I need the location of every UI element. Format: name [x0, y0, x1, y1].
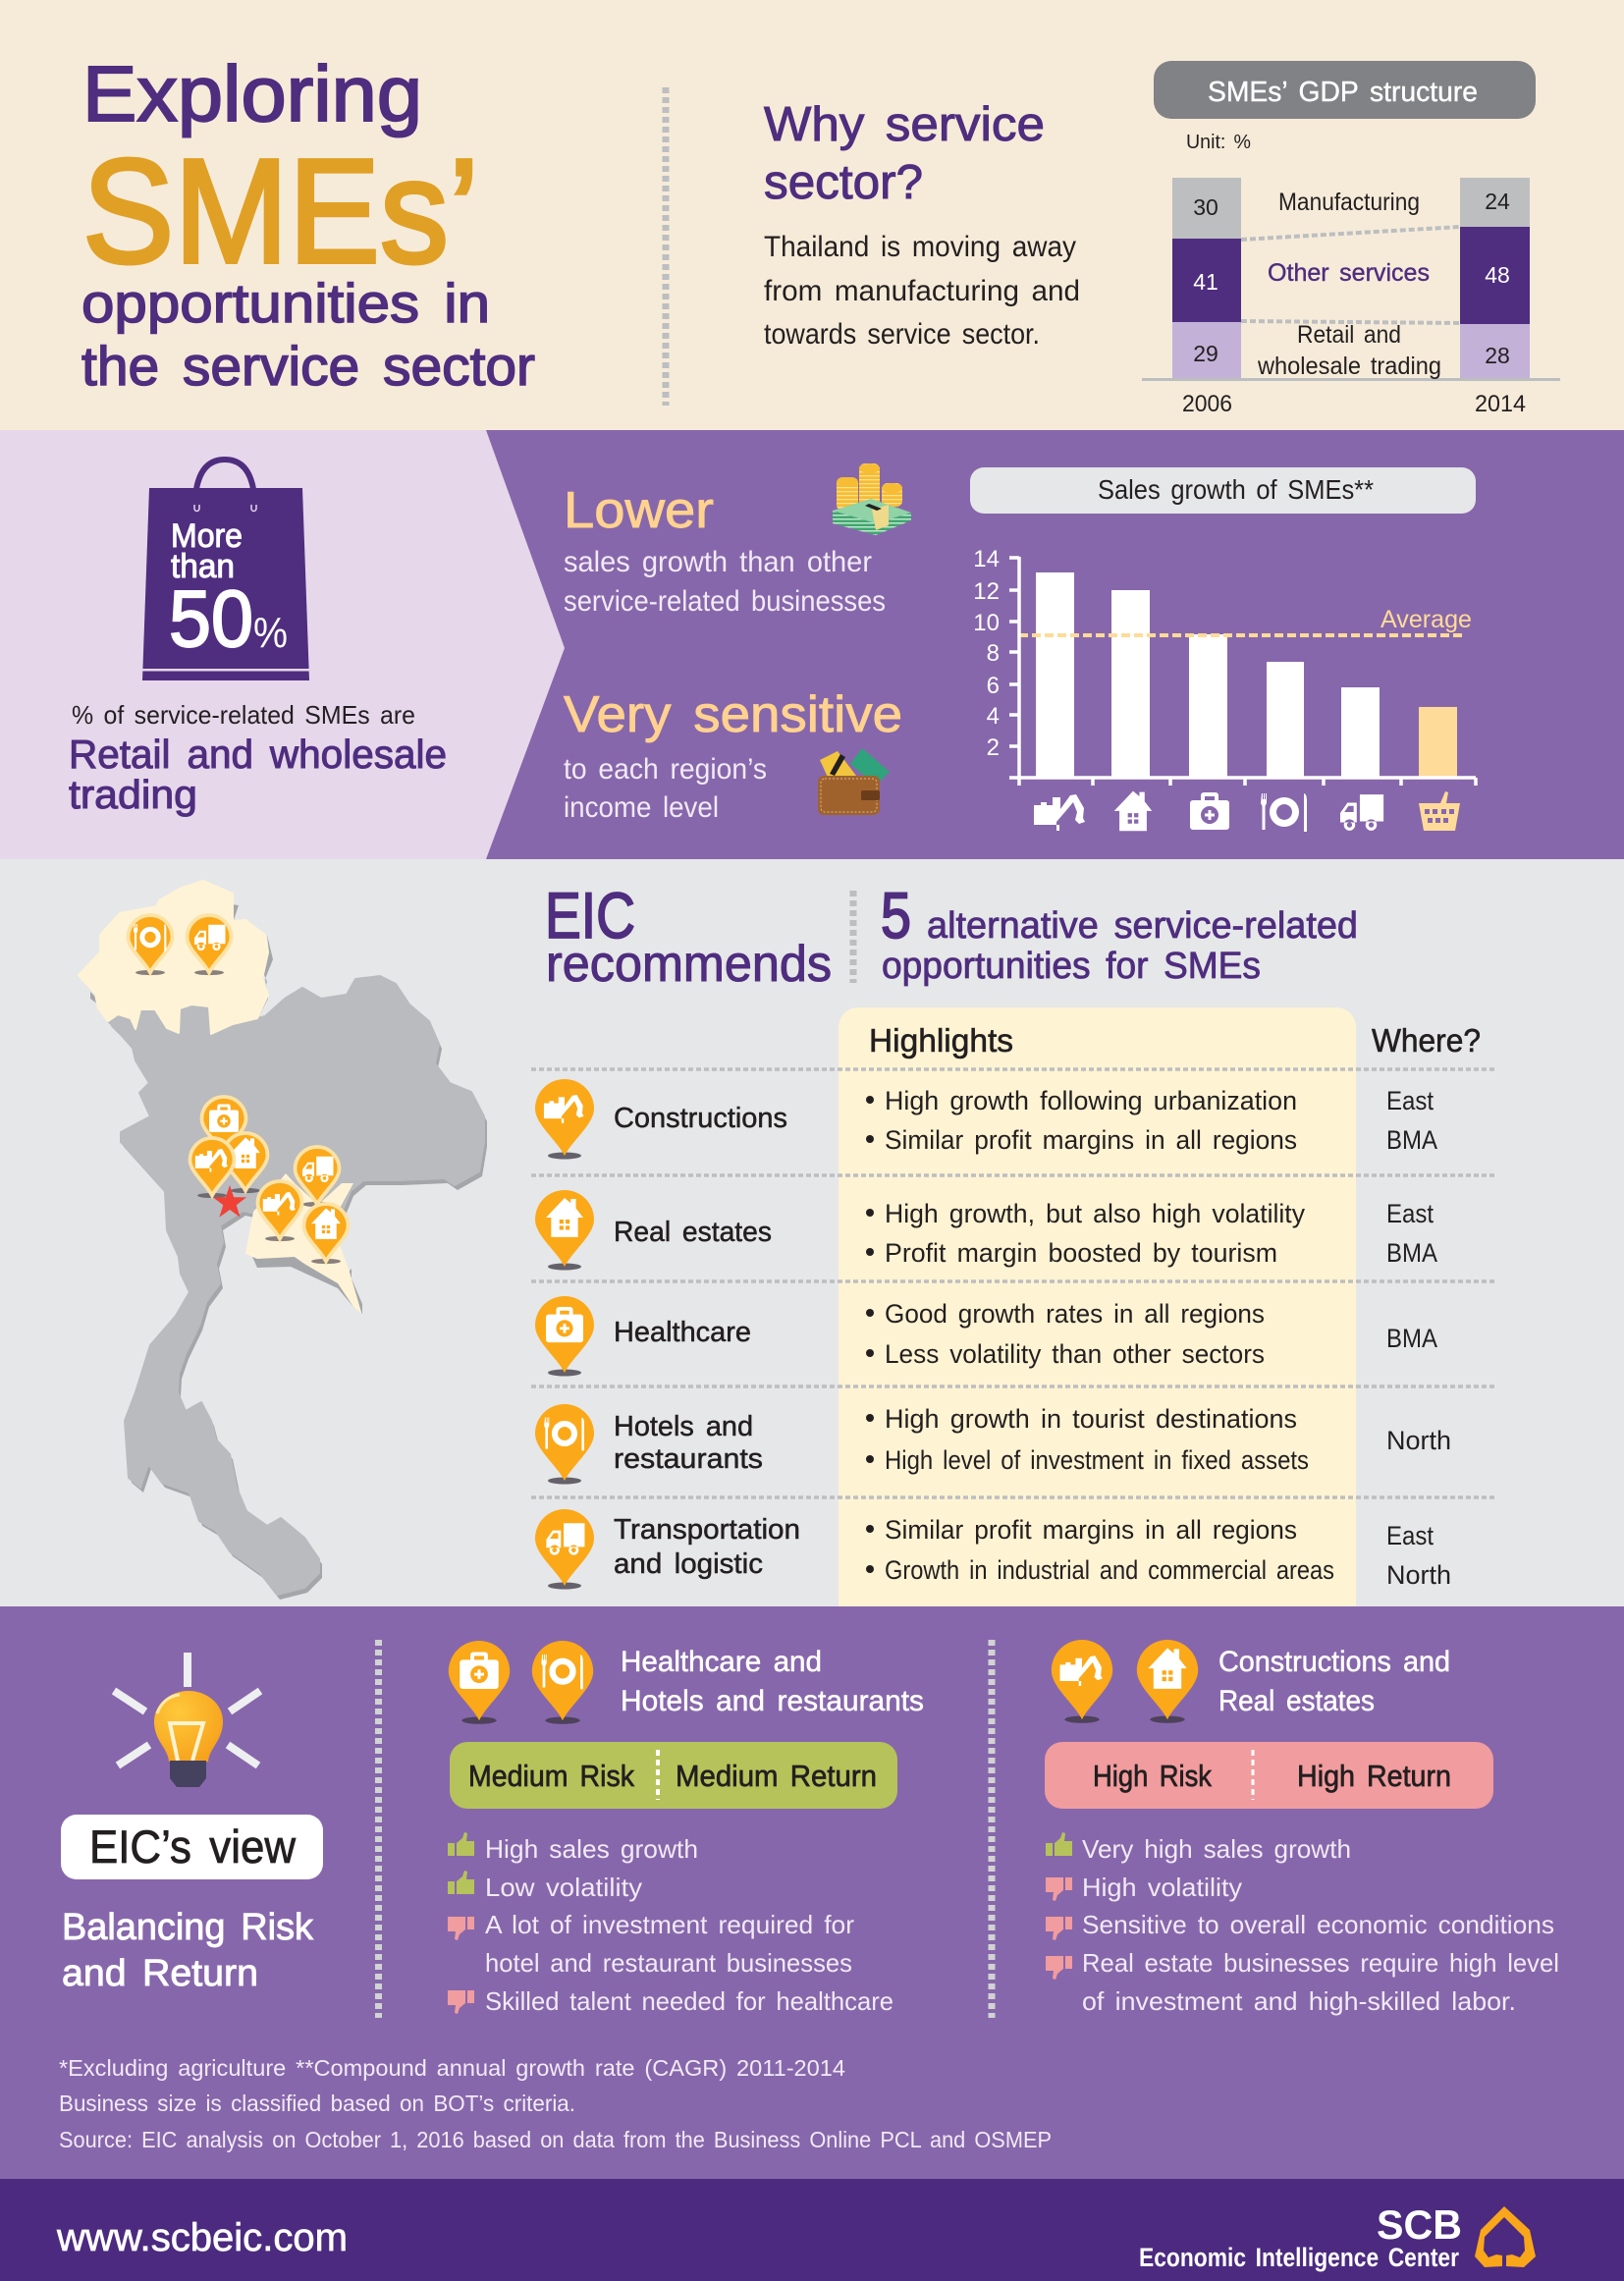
pin: constructions [1052, 1640, 1112, 1723]
icon: shopping bag: % [253, 609, 288, 657]
chart title pill: SMEs’ GDP structure [1208, 77, 1478, 108]
map edge shading [90, 904, 362, 1314]
row: healthcare: Good growth rates in all regions [885, 1299, 1265, 1329]
label: EIC's view: EIC’s view [89, 1820, 297, 1873]
panel: sales section [0, 430, 1624, 859]
list: pros and cons: High sales growth [485, 1834, 698, 1864]
row: healthcare [535, 1296, 1437, 1377]
heading: 5 alternative opportunities [881, 879, 1358, 987]
text block: retail share: trading [69, 772, 197, 817]
row: healthcare: Healthcare [614, 1317, 751, 1348]
footnotes: *Excluding agriculture **Compound annual growth rate (CAGR) 2011-2014 [59, 2055, 845, 2081]
row: constructions: Similar profit margins in all regions [885, 1125, 1297, 1155]
row: real estates: High growth, but also high volatility [885, 1199, 1305, 1228]
row: transportation and logistic: Growth in industrial and commercial areas [885, 1555, 1334, 1585]
map of Thailand [79, 881, 487, 1600]
website: www.scbeic.com [56, 2216, 348, 2259]
list: pros and cons: Real estate businesses require high level [1082, 1948, 1559, 1978]
row: constructions: BMA [1386, 1125, 1437, 1155]
row: transportation and logistic [535, 1509, 1451, 1590]
text block: very sensitive: income level [564, 791, 719, 824]
heading: why service sector: sector? [764, 156, 923, 209]
row: hotels and restaurants: North [1386, 1426, 1451, 1455]
list: pros and cons [448, 1832, 893, 2016]
icon: light bulb [114, 1653, 260, 1787]
table: opportunities: Where? [1372, 1022, 1481, 1059]
column heading: Healthcare and [621, 1646, 822, 1678]
row: constructions: High growth following urbanization [885, 1086, 1297, 1115]
chart: sales growth of SMEs: 6 [987, 673, 1000, 699]
row: hotels and restaurants: restaurants [614, 1443, 763, 1475]
footnotes: Source: EIC analysis on October 1, 2016 based on data from the Business Online PCL and OSMEP [59, 2127, 1052, 2152]
heading: EIC recommends [545, 879, 832, 993]
list: pros and cons: of investment and high-skilled labor. [1082, 1986, 1516, 2016]
list: pros and cons: Sensitive to overall economic conditions [1082, 1910, 1554, 1939]
chart: sales growth of SMEs [970, 467, 1476, 832]
list: pros and cons: Skilled talent needed for healthcare [485, 1986, 893, 2016]
column heading: Constructions and [1218, 1646, 1450, 1678]
text block: lower sales growth: sales growth than other [564, 546, 872, 578]
pin: transport east [295, 1147, 340, 1207]
heading: why service sector: Why service [764, 98, 1045, 151]
row: constructions [535, 1079, 1437, 1159]
row: real estates: Profit margin boosted by tourism [885, 1238, 1277, 1268]
text block: lower sales growth: service-related businesses [564, 585, 886, 618]
row: transportation and logistic: Similar profit margins in all regions [885, 1515, 1297, 1545]
list: pros and cons: High volatility [1082, 1873, 1242, 1902]
column heading: Hotels and restaurants [621, 1685, 924, 1717]
row: constructions: East [1386, 1086, 1434, 1115]
pin: construction east [257, 1181, 302, 1241]
chart: SMEs GDP structure: 48 [1485, 262, 1510, 288]
heading: why service sector [764, 98, 1045, 209]
pin: construction BMA [190, 1138, 234, 1198]
chart title pill: Sales growth of SMEs** [1098, 474, 1374, 505]
icon: shopping bag: More [171, 517, 243, 555]
chart: SMEs GDP structure: 2014 [1475, 391, 1526, 417]
heading: EIC recommends: EIC [545, 879, 635, 951]
chart: SMEs GDP structure: 2006 [1182, 391, 1232, 417]
chart: sales growth of SMEs: 2 [987, 734, 1000, 761]
title: SMEs’ [82, 128, 479, 294]
text block: retail share [69, 700, 447, 817]
chart: sales growth of SMEs: 10 [973, 610, 1000, 636]
text block: very sensitive: Very sensitive [564, 686, 902, 743]
footnotes: Business size is classified based on BOT’s criteria. [59, 2091, 575, 2116]
row: real estates: Real estates [614, 1217, 772, 1248]
row: transportation and logistic: Transportation [614, 1514, 800, 1546]
column heading: Real estates [1218, 1685, 1375, 1717]
row: hotels and restaurants: Hotels and [614, 1411, 753, 1442]
row: transportation and logistic: and logistic [614, 1548, 763, 1580]
pin: hotels and restaurants [532, 1641, 593, 1724]
label: EIC's view [61, 1815, 323, 1879]
chart: SMEs GDP structure: wholesale trading [1257, 353, 1441, 380]
text block: why service sector [764, 231, 1080, 351]
title: opportunities in [81, 272, 490, 334]
pin: transport north [187, 915, 232, 975]
row: healthcare: BMA [1386, 1324, 1437, 1353]
footnotes [59, 2055, 1052, 2152]
row: real estates [535, 1190, 1437, 1271]
logo text: SCB [1377, 2201, 1462, 2248]
icon: Bangkok star [213, 1185, 246, 1218]
text block: very sensitive: to each region’s [564, 753, 767, 786]
chart: SMEs GDP structure: 30 [1193, 194, 1218, 220]
chart: sales growth of SMEs: 8 [987, 640, 1000, 667]
pin: hotels north [128, 915, 173, 975]
pin: healthcare BMA [202, 1097, 245, 1157]
text block: very sensitive [564, 686, 902, 824]
title [81, 50, 535, 397]
heading: 5 alternative opportunities: opportunities for SMEs [882, 946, 1261, 987]
text block: retail share: % of service-related SMEs are [72, 700, 415, 730]
text block: why service sector: Thailand is moving away [764, 231, 1076, 263]
row: real estates: BMA [1386, 1238, 1437, 1268]
panel: EIC recommends [0, 859, 1624, 1606]
pill: medium risk medium return [450, 1742, 897, 1809]
chart title pill [1154, 61, 1536, 119]
pin: real estate east [304, 1204, 348, 1264]
logo text: Economic Intelligence Center [1139, 2243, 1459, 2272]
table: opportunities [531, 1007, 1495, 1606]
region: east [245, 1173, 361, 1314]
column: high risk [1045, 1640, 1559, 2016]
pill: medium risk medium return: Medium Return [676, 1759, 877, 1793]
heading: EIC recommends: recommends [546, 936, 832, 993]
row: transportation and logistic: North [1386, 1560, 1451, 1590]
chart: SMEs GDP structure [1142, 61, 1560, 417]
row: hotels and restaurants: High growth in tourist destinations [885, 1404, 1297, 1434]
chart title pill [970, 467, 1476, 514]
pill: high risk high return [1045, 1742, 1493, 1809]
chart: SMEs GDP structure: 28 [1485, 343, 1510, 368]
chart: SMEs GDP structure: Manufacturing [1278, 189, 1420, 216]
text block: lower sales growth [564, 482, 886, 618]
footer [0, 2179, 1624, 2281]
icon: SCB logo [1475, 2206, 1536, 2267]
icon: shopping bag: than [171, 548, 235, 585]
column heading [1218, 1646, 1450, 1717]
chart: SMEs GDP structure: 24 [1485, 189, 1510, 214]
pill: high risk high return: High Return [1297, 1759, 1451, 1793]
map land [108, 976, 484, 1595]
heading: 5 alternative opportunities: alternative service-related [927, 905, 1358, 947]
region: north [79, 881, 268, 1034]
chart: SMEs GDP structure: Unit: % [1186, 132, 1251, 153]
text block: retail share: Retail and wholesale [69, 732, 447, 777]
pill: medium risk medium return: Medium Risk [468, 1759, 634, 1793]
heading: 5 alternative opportunities: 5 [881, 879, 911, 951]
row: real estates: East [1386, 1199, 1434, 1228]
list: pros and cons: A lot of investment required for [485, 1910, 854, 1939]
chart: sales growth of SMEs: 12 [973, 578, 1000, 605]
map shadow [111, 981, 487, 1600]
chart: sales growth of SMEs: 4 [987, 703, 1000, 730]
column: medium risk [448, 1641, 924, 2016]
chart: sales growth of SMEs: Average [1380, 606, 1472, 633]
text block: lower sales growth: Lower [564, 482, 714, 539]
title: the service sector [81, 335, 535, 397]
panel: header [0, 0, 1624, 430]
chart: SMEs GDP structure: 41 [1193, 269, 1218, 295]
column heading [621, 1646, 924, 1717]
heading: balancing risk and return [62, 1907, 314, 1994]
pin: real estates [1137, 1640, 1198, 1723]
table: opportunities: Highlights [869, 1022, 1013, 1059]
icon row: sector icons [1034, 791, 1460, 832]
row: healthcare: Less volatility than other sectors [885, 1339, 1265, 1369]
logo text [1139, 2201, 1462, 2272]
chart: SMEs GDP structure: 29 [1193, 341, 1218, 366]
list: pros and cons: hotel and restaurant businesses [485, 1948, 852, 1978]
pin: real estate BMA [224, 1133, 267, 1193]
title: Exploring [82, 50, 422, 137]
row: constructions: Constructions [614, 1103, 787, 1134]
row: transportation and logistic: East [1386, 1521, 1434, 1550]
heading: balancing risk and return: and Return [62, 1953, 258, 1994]
panel: EIC's view [0, 1606, 1624, 2179]
row: hotels and restaurants: High level of investment in fixed assets [885, 1445, 1309, 1475]
list: pros and cons [1046, 1832, 1559, 2016]
list: pros and cons: Low volatility [485, 1873, 642, 1902]
chart: SMEs GDP structure: Retail and [1297, 321, 1401, 349]
icon: coins and cash [833, 463, 911, 535]
heading: balancing risk and return: Balancing Risk [62, 1907, 314, 1948]
text block: why service sector: towards service sector. [764, 318, 1040, 351]
chart: sales growth of SMEs: 14 [973, 546, 1000, 572]
chart: SMEs GDP structure: Other services [1268, 259, 1430, 287]
icon: shopping bag [142, 460, 309, 680]
pill: high risk high return: High Risk [1093, 1759, 1212, 1793]
icon: shopping bag: 50 [169, 574, 253, 664]
row: hotels and restaurants [535, 1404, 1451, 1485]
icon: wallet [818, 748, 890, 815]
list: pros and cons: Very high sales growth [1082, 1834, 1351, 1864]
pin: healthcare [449, 1641, 510, 1724]
text block: why service sector: from manufacturing and [764, 275, 1080, 307]
